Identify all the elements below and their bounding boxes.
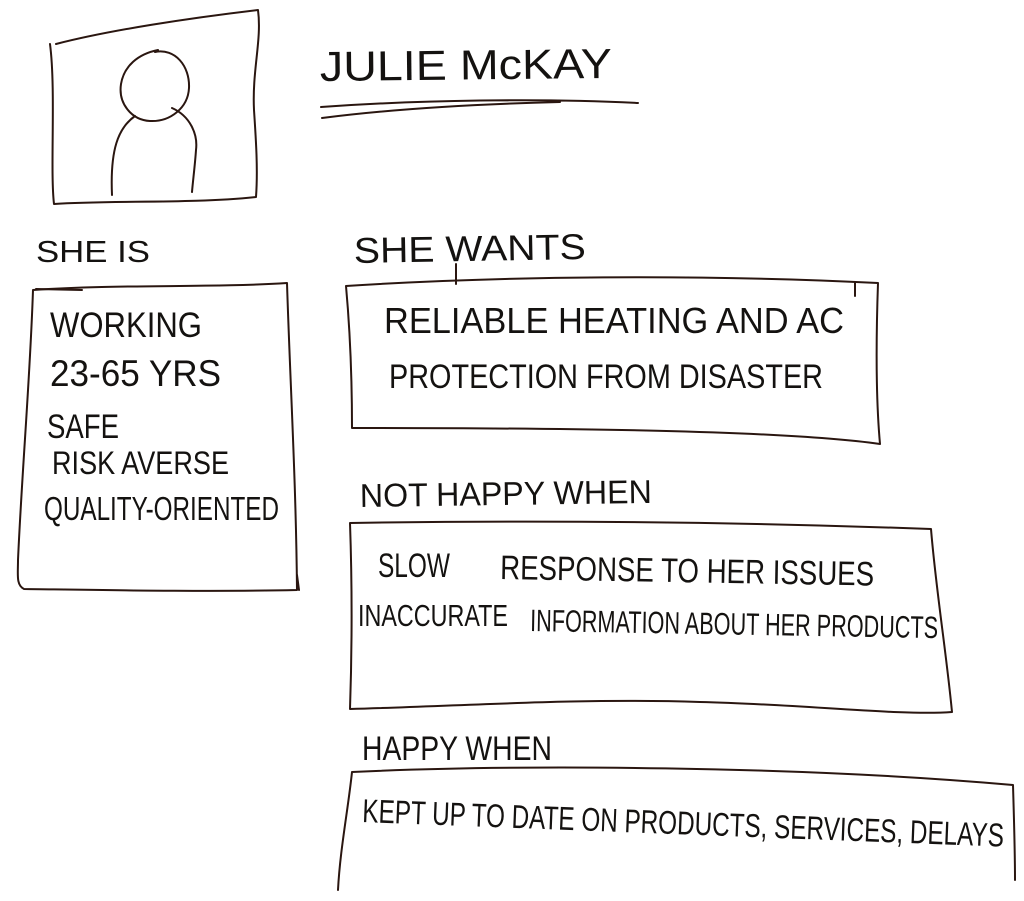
- not happy: slow: SLOW: [378, 547, 450, 585]
- panel: happy when: [338, 768, 1015, 890]
- she is: age: 23-65 YRS: [50, 353, 221, 394]
- icon: person head: [121, 50, 189, 121]
- panel: she wants: [346, 264, 880, 444]
- portrait panel: [50, 10, 259, 204]
- not happy: inaccurate: INACCURATE: [358, 598, 508, 633]
- she is: risk averse: RISK AVERSE: [52, 445, 229, 481]
- she is: safe: SAFE: [47, 408, 119, 446]
- heading: she is: SHE IS: [36, 234, 150, 269]
- wants: heating: RELIABLE HEATING AND AC: [384, 300, 844, 341]
- heading: not happy when: NOT HAPPY WHEN: [360, 473, 652, 514]
- panel: she is: [18, 283, 299, 591]
- title: name: JULIE McKAY: [320, 40, 612, 90]
- heading: she wants: SHE WANTS: [353, 226, 586, 271]
- not happy: response: RESPONSE TO HER ISSUES: [500, 549, 874, 594]
- panel: not happy when: [350, 522, 952, 713]
- heading: happy when: HAPPY WHEN: [362, 730, 552, 768]
- icon: person body: [112, 108, 196, 195]
- title underline: [321, 100, 638, 118]
- she is: quality-oriented: QUALITY-ORIENTED: [44, 490, 279, 527]
- wants: protection: PROTECTION FROM DISASTER: [389, 358, 823, 396]
- she is: working: WORKING: [50, 306, 202, 345]
